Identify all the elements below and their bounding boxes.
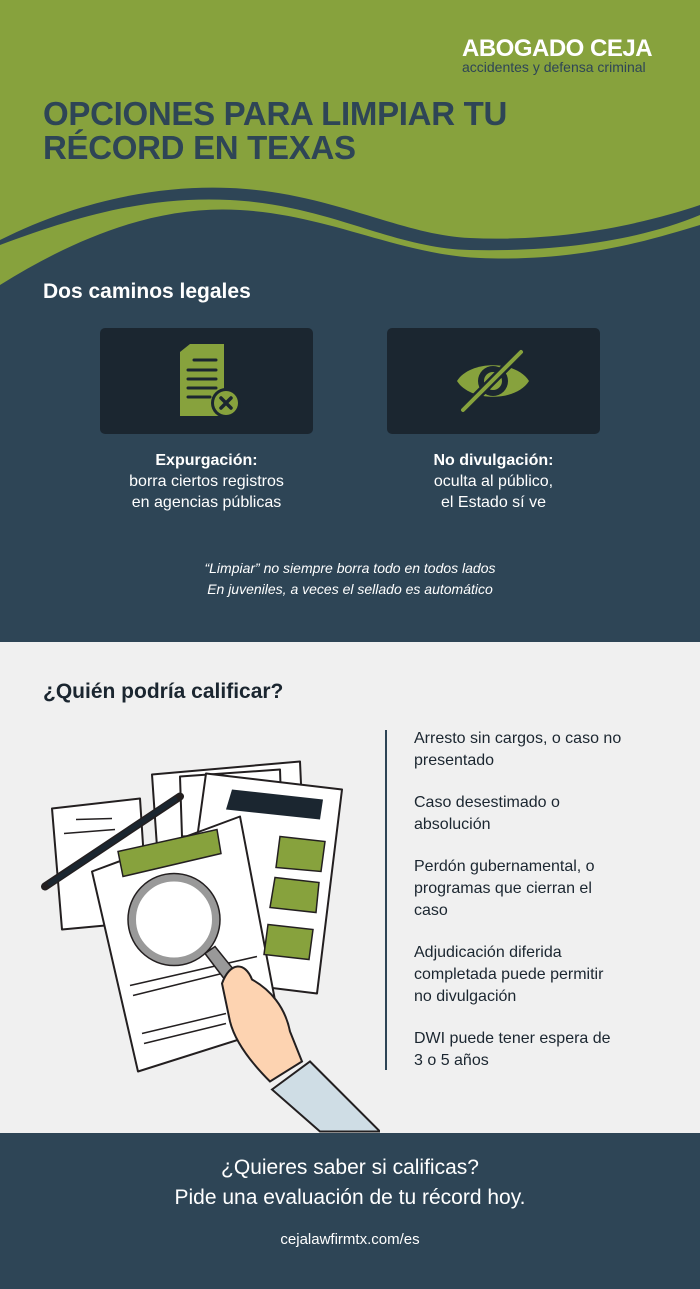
panel: quien podria calificar (0, 642, 700, 1133)
text: no divulgacion: oculta al público, (434, 473, 553, 490)
illustration: documents (41, 760, 380, 1132)
list: qualifying criteria: absolución (414, 816, 490, 833)
footer url: cejalawfirmtx.com/es (280, 1231, 420, 1248)
list: qualifying criteria: Arresto sin cargos, o caso no (414, 730, 621, 747)
header background (0, 0, 700, 300)
wave (0, 188, 700, 300)
list: qualifying criteria: Caso desestimado o (414, 794, 560, 811)
heading: ¿Quién podría calificar? (43, 680, 283, 703)
icon: document x (180, 344, 238, 416)
heading: dos caminos: Dos caminos legales (43, 280, 251, 303)
footer CTA: Pide una evaluación de tu récord hoy. (174, 1186, 526, 1209)
text: no divulgacion: No divulgación: (434, 452, 554, 469)
list: qualifying criteria: no divulgación (414, 988, 516, 1005)
text: expurgacion: borra ciertos registros (129, 473, 284, 490)
title: RÉCORD EN TEXAS (43, 129, 356, 166)
text: expurgacion: en agencias públicas (132, 494, 281, 511)
text: expurgacion: Expurgación: (155, 452, 258, 469)
card: no divulgacion (387, 328, 600, 434)
text: expurgacion (129, 452, 284, 511)
list: qualifying criteria: Adjudicación diferida (414, 944, 562, 961)
text: no divulgacion: el Estado sí ve (441, 494, 546, 511)
list: qualifying criteria: presentado (414, 752, 494, 769)
logo: accidentes y defensa criminal (462, 59, 646, 75)
list: qualifying criteria: 3 o 5 años (414, 1052, 489, 1069)
title: OPCIONES PARA LIMPIAR TU (43, 95, 507, 132)
logo (462, 35, 652, 75)
note: “Limpiar” no siempre borra todo en todos lados (204, 560, 496, 576)
list: qualifying criteria: completada puede permitir (414, 966, 603, 983)
note (204, 560, 496, 597)
list: qualifying criteria (414, 730, 621, 1069)
logo: ABOGADO CEJA (462, 35, 652, 62)
title (43, 95, 507, 166)
footer CTA: ¿Quieres saber si calificas? (221, 1156, 479, 1179)
icon: eye slash (457, 350, 529, 412)
note: En juveniles, a veces el sellado es automático (207, 581, 493, 597)
list: qualifying criteria: DWI puede tener espera de (414, 1030, 611, 1047)
list: qualifying criteria: caso (414, 902, 448, 919)
list: qualifying criteria: programas que cierran el (414, 880, 592, 897)
text: no divulgacion (434, 452, 554, 511)
divider (385, 730, 387, 1070)
card: expurgacion (100, 328, 313, 434)
list: qualifying criteria: Perdón gubernamental, o (414, 858, 595, 875)
footer CTA (174, 1156, 526, 1209)
